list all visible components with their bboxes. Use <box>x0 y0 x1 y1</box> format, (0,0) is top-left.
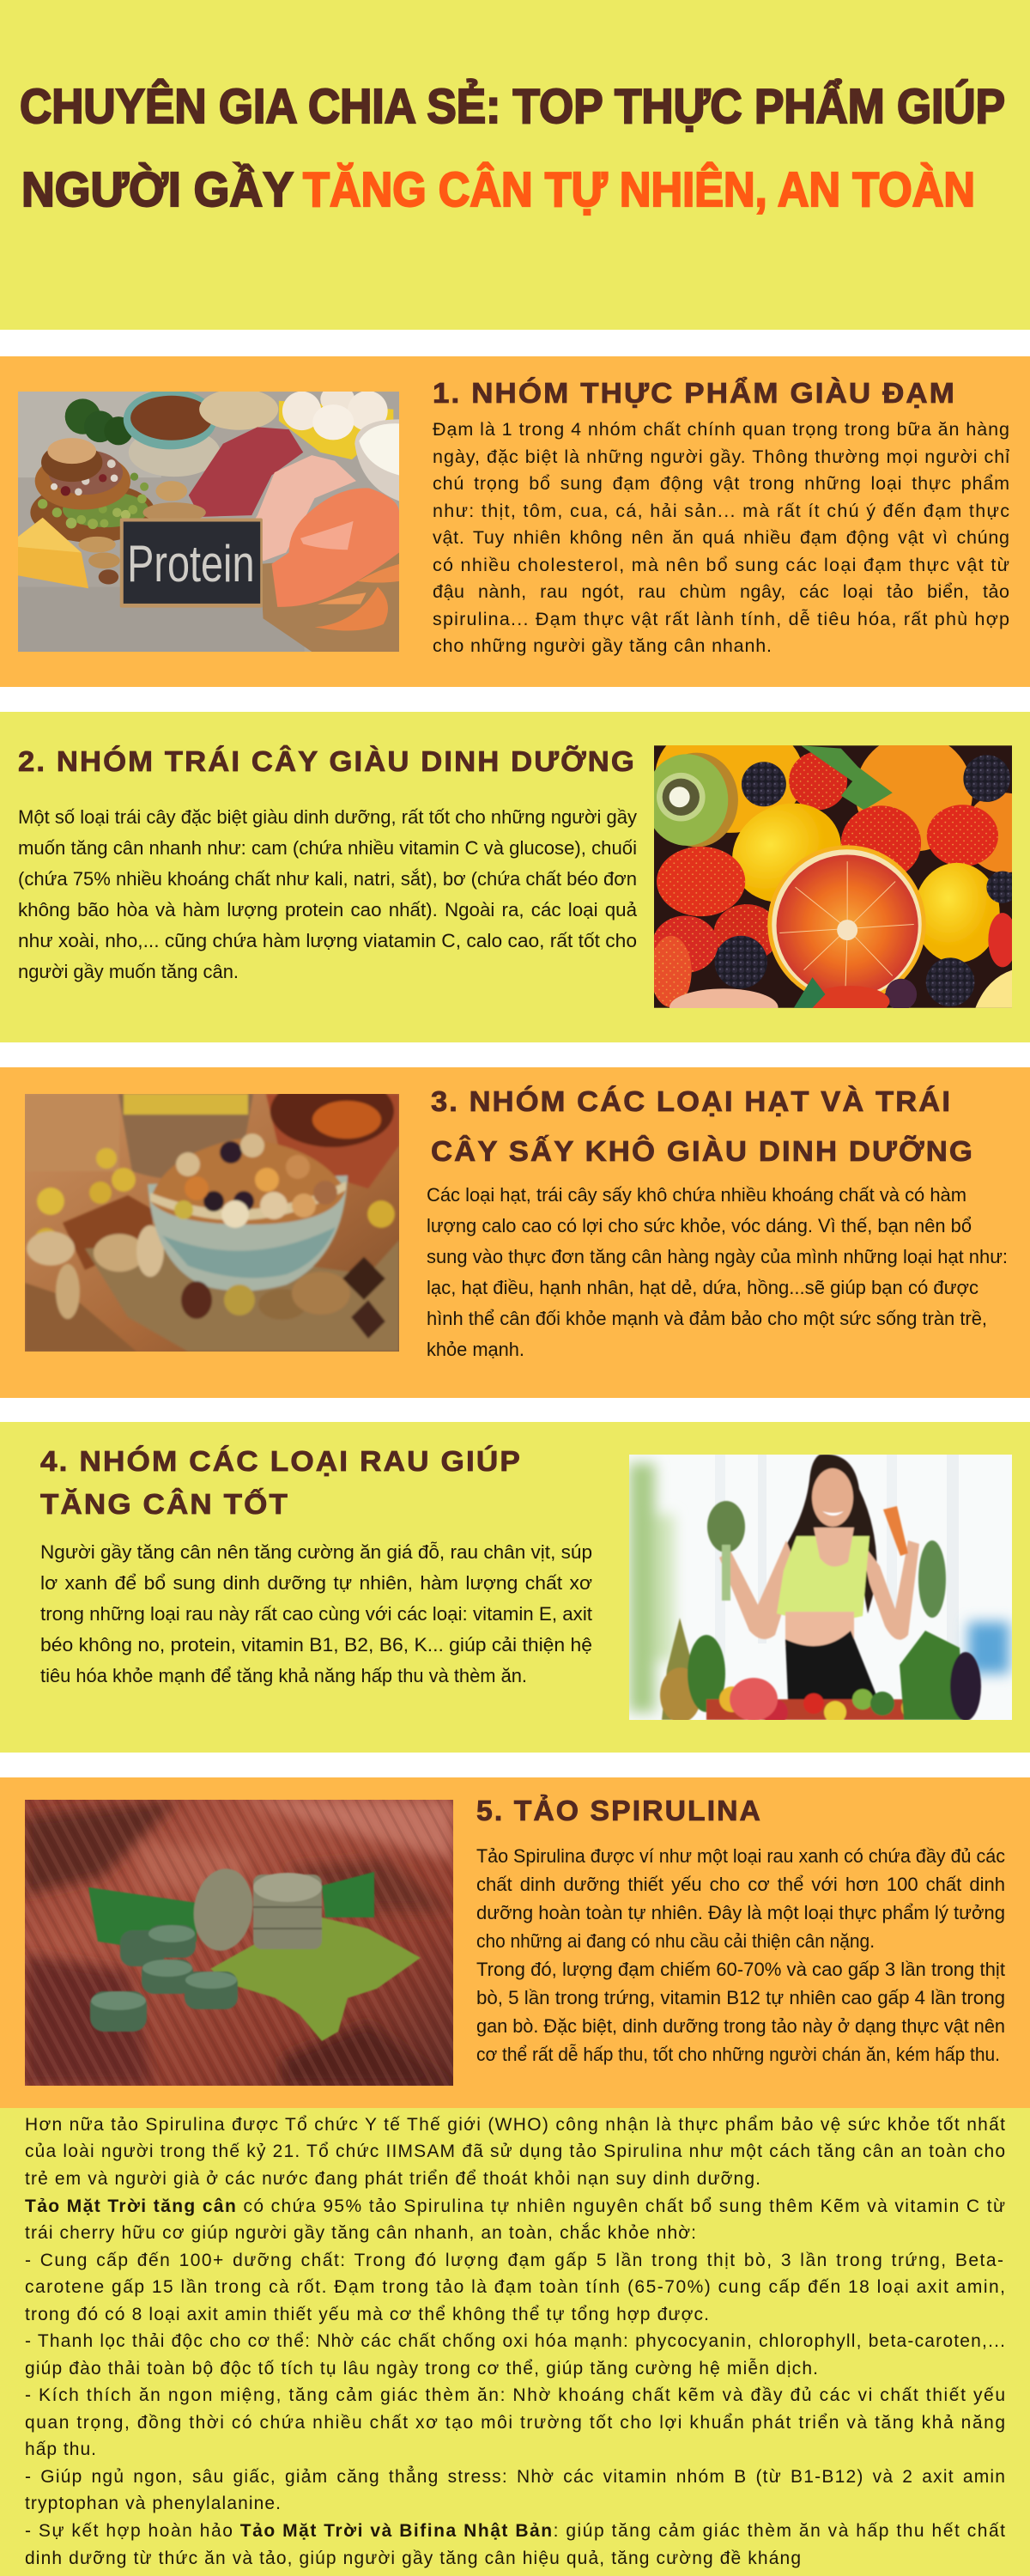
text block: details: tryptophan và phenylalanine. <box>25 2494 281 2513</box>
body: section 5: Tảo Spirulina được ví như một loại rau xanh có chứa đầy đủ các <box>476 1845 1005 1867</box>
body: section 1 <box>433 419 1009 656</box>
heading: section 2: 2. NHÓM TRÁI CÂY GIÀU DINH DƯỠNG <box>18 745 636 777</box>
text block: details: - Cung cấp đến 100+ dưỡng chất: Trong đó lượng đạm gấp 5 lần trong thịt bò, 3 lần trong trứng, Beta- <box>25 2251 1003 2270</box>
panel: nuts and dried fruit <box>0 1067 1030 1398</box>
body: section 5: bò, 5 lần trong trứng, vitamin B12 tự nhiên cao gấp 4 lần trong <box>476 1987 1005 2008</box>
panel: spirulina details <box>0 2108 1030 2576</box>
panel: header <box>0 0 1030 330</box>
heading: section 4: 4. NHÓM CÁC LOẠI RAU GIÚP <box>40 1445 522 1477</box>
body: section 3: khỏe mạnh. <box>427 1339 524 1360</box>
panel: vegetables <box>0 1422 1030 1753</box>
body: section 2: (chứa 75% nhiều khoáng chất như kali, natri, sắt), bơ (chứa chất béo đơn <box>18 868 637 890</box>
text block: details: Tảo Mặt Trời tăng cân có chứa 95% tảo Spirulina tự nhiên nguyên chất bổ sung thêm Kẽm và vitamin C từ <box>25 2196 1005 2216</box>
body: section 1: như: thịt, tôm, cua, cá, hải sản... mà rất ít chú ý đến đạm thực <box>433 501 1009 521</box>
text block: details: hấp thu. <box>25 2439 96 2459</box>
text block: details: carotene gấp 15 lần trong cà rốt. Đạm trong tảo là đạm toàn tính (65-70%) cung cấp đến 18 loại axit amin, <box>25 2277 1005 2297</box>
body: section 1: chú trọng bổ sung đạm động vật trong những loại thực phẩm <box>433 473 1009 494</box>
body: section 5: dưỡng hoàn toàn tự nhiên. Đây là một loại thực phẩm lý tưởng <box>476 1902 1005 1923</box>
body: section 3: lượng calo cao có lợi cho sức khỏe, vóc dáng. Vì thế, bạn nên bổ <box>427 1215 972 1236</box>
text block: details: dinh dưỡng từ thức ăn và tảo, giúp người gầy tăng cân hiệu quả, tăng cường đề kháng <box>25 2549 801 2568</box>
photo: spirulina tablets <box>25 1800 453 2086</box>
body: section 5: Trong đó, lượng đạm chiếm 60-70% và cao gấp 3 lần trong thịt <box>476 1959 1006 1980</box>
body: section 3: sung vào thực đơn tăng cân hàng ngày của mình những loại hạt như: <box>427 1246 1008 1267</box>
body: section 1: đậu nành, rau ngót, rau chùm ngây, các loại tảo biển, tảo <box>433 581 1009 602</box>
panel: protein foods <box>0 356 1030 687</box>
text block: details: - Kích thích ăn ngon miệng, tăng cảm giác thèm ăn: Nhờ khoáng chất kẽm và đầy đủ các vi chất thiết yếu <box>25 2385 1005 2405</box>
heading: section 4: TĂNG CÂN TỐT <box>40 1487 289 1520</box>
title <box>20 78 1005 217</box>
panel: spirulina <box>0 1777 1030 2108</box>
heading: section 3: CÂY SẤY KHÔ GIÀU DINH DƯỠNG <box>431 1134 974 1167</box>
body: section 5 <box>476 1845 1006 2065</box>
body: section 4: Người gầy tăng cân nên tăng cường ăn giá đỗ, rau chân vịt, súp <box>40 1541 592 1563</box>
heading: section 5: 5. TẢO SPIRULINA <box>476 1795 762 1826</box>
body: section 3: lạc, hạt điều, hạnh nhân, hạt dẻ, dứa, hồng...sẽ giúp bạn có được <box>427 1277 978 1298</box>
body: section 2 <box>18 806 638 982</box>
text block: details: Hơn nữa tảo Spirulina được Tổ chức Y tế Thế giới (WHO) công nhận là thực phẩm bảo vệ sức khỏe tốt nhất <box>25 2115 1005 2135</box>
body: section 2: như xoài, nho,... cũng chứa hàm lượng viatamin C, calo cao, rất tốt cho <box>18 930 637 951</box>
photo: woman with vegetables <box>629 1455 1012 1720</box>
text block: details: trái cherry hữu cơ giúp người gầy tăng cân nhanh, an toàn, chắc khỏe nhờ: <box>25 2223 696 2243</box>
body: section 3 <box>427 1184 1008 1360</box>
body: section 5: cho những ai đang có nhu cầu cải thiện cân nặng. <box>476 1930 875 1952</box>
body: section 4: trong những loại rau này rất cao cùng với các loại: vitamin E, axit <box>40 1603 593 1625</box>
body: section 1: cho những người gầy tăng cân nhanh. <box>433 635 772 656</box>
photo: protein foods <box>18 392 399 652</box>
photo: protein foods: Protein <box>127 535 255 592</box>
body: section 4: lơ xanh để bổ sung dinh dưỡng tự nhiên, hàm lượng chất xơ <box>40 1572 592 1594</box>
text block: details: giúp đào thải toàn bộ độc tố tích tụ lâu ngày trong cơ thể, giúp tăng cường hệ miễn dịch. <box>25 2359 818 2379</box>
body: section 3: Các loại hạt, trái cây sấy khô chứa nhiều khoáng chất và có hàm <box>427 1184 966 1206</box>
photo: fruit <box>654 745 1012 1008</box>
body: section 4: béo không no, protein, vitamin B1, B2, B6, K... giúp cải thiện hệ <box>40 1634 592 1656</box>
panel: fruit <box>0 712 1030 1042</box>
heading: section 3 <box>431 1085 974 1167</box>
text block: details: - Thanh lọc thải độc cho cơ thể: Nhờ các chất chống oxi hóa mạnh: phycocyanin, chlorophyll, beta-caroten,... <box>25 2331 1005 2351</box>
text block: details <box>25 2115 1005 2568</box>
text block: details: quan trọng, đồng thời có chứa nhiều chất xơ tạo môi trường tốt cho lợi khuẩn phát triển và tăng khả năng <box>25 2413 1005 2433</box>
photo: nuts <box>25 1094 399 1352</box>
body: section 5: cơ thể rất dễ hấp thu, tốt cho những người chán ăn, kém hấp thu. <box>476 2044 1000 2065</box>
text block: details: trong đó có 8 loại axit amin thiết yếu mà cơ thể không thể tự tổng hợp được. <box>25 2305 709 2324</box>
body: section 5: chất dinh dưỡng thiết yếu cho cơ thể với hơn 100 chất dinh <box>476 1874 1005 1895</box>
body: section 3: hình thể cân đối khỏe mạnh và đảm bảo cho một sức sống tràn trề, <box>427 1308 987 1329</box>
text block: details: - Sự kết hợp hoàn hảo Tảo Mặt Trời và Bifina Nhật Bản: giúp tăng cảm giác thèm ăn và hấp thu hết chất <box>25 2521 1005 2541</box>
body: section 2: người gầy muốn tăng cân. <box>18 961 239 982</box>
body: section 4 <box>40 1541 593 1686</box>
body: section 1: ngày, đặc biệt là những người gầy. Thông thường mọi người chỉ <box>433 447 1009 467</box>
body: section 1: có nhiều cholesterol, mà nên bổ sung các loại đạm thực vật từ <box>433 555 1009 575</box>
title: NGƯỜI GẦY <box>21 161 294 217</box>
body: section 5: gan bò. Đặc biệt, dinh dưỡng trong tảo này ở dạng thực vật nên <box>476 2015 1005 2037</box>
body: section 1: spirulina... Đạm thực vật rất lành tính, dễ tiêu hóa, rất phù hợp <box>433 608 1009 629</box>
heading: section 3: 3. NHÓM CÁC LOẠI HẠT VÀ TRÁI <box>431 1085 952 1117</box>
body: section 1: Đạm là 1 trong 4 nhóm chất chính quan trọng trong bữa ăn hàng <box>433 419 1009 440</box>
text block: details: trẻ em và người già ở các nước đang phát triển để thoát khỏi nạn suy dinh dưỡng. <box>25 2169 760 2189</box>
body: section 2: không bão hòa và hàm lượng protein cao nhất). Ngoài ra, các loại quả <box>18 899 637 920</box>
heading: section 4 <box>40 1445 522 1520</box>
heading: section 1: 1. NHÓM THỰC PHẨM GIÀU ĐẠM <box>433 377 956 409</box>
text block: details: - Giúp ngủ ngon, sâu giấc, giảm căng thẳng stress: Nhờ các vitamin nhóm B (từ B1-B12) và 2 axit amin <box>25 2466 1005 2487</box>
body: section 4: tiêu hóa khỏe mạnh để tăng khả năng hấp thu và thèm ăn. <box>40 1665 527 1686</box>
body: section 2: Một số loại trái cây đặc biệt giàu dinh dưỡng, rất tốt cho những người gầy <box>18 806 638 828</box>
body: section 1: vật. Tuy nhiên không nên ăn quá nhiều đạm động vật vì chúng <box>433 527 1009 548</box>
text block: details: của loài người trong thế kỷ 21. Tổ chức IIMSAM đã sử dụng tảo Spirulina như một cách tăng cân an toàn cho <box>25 2142 1005 2161</box>
body: section 2: muốn tăng cân nhanh như: cam (chứa nhiều vitamin C và glucose), chuối <box>18 837 637 859</box>
